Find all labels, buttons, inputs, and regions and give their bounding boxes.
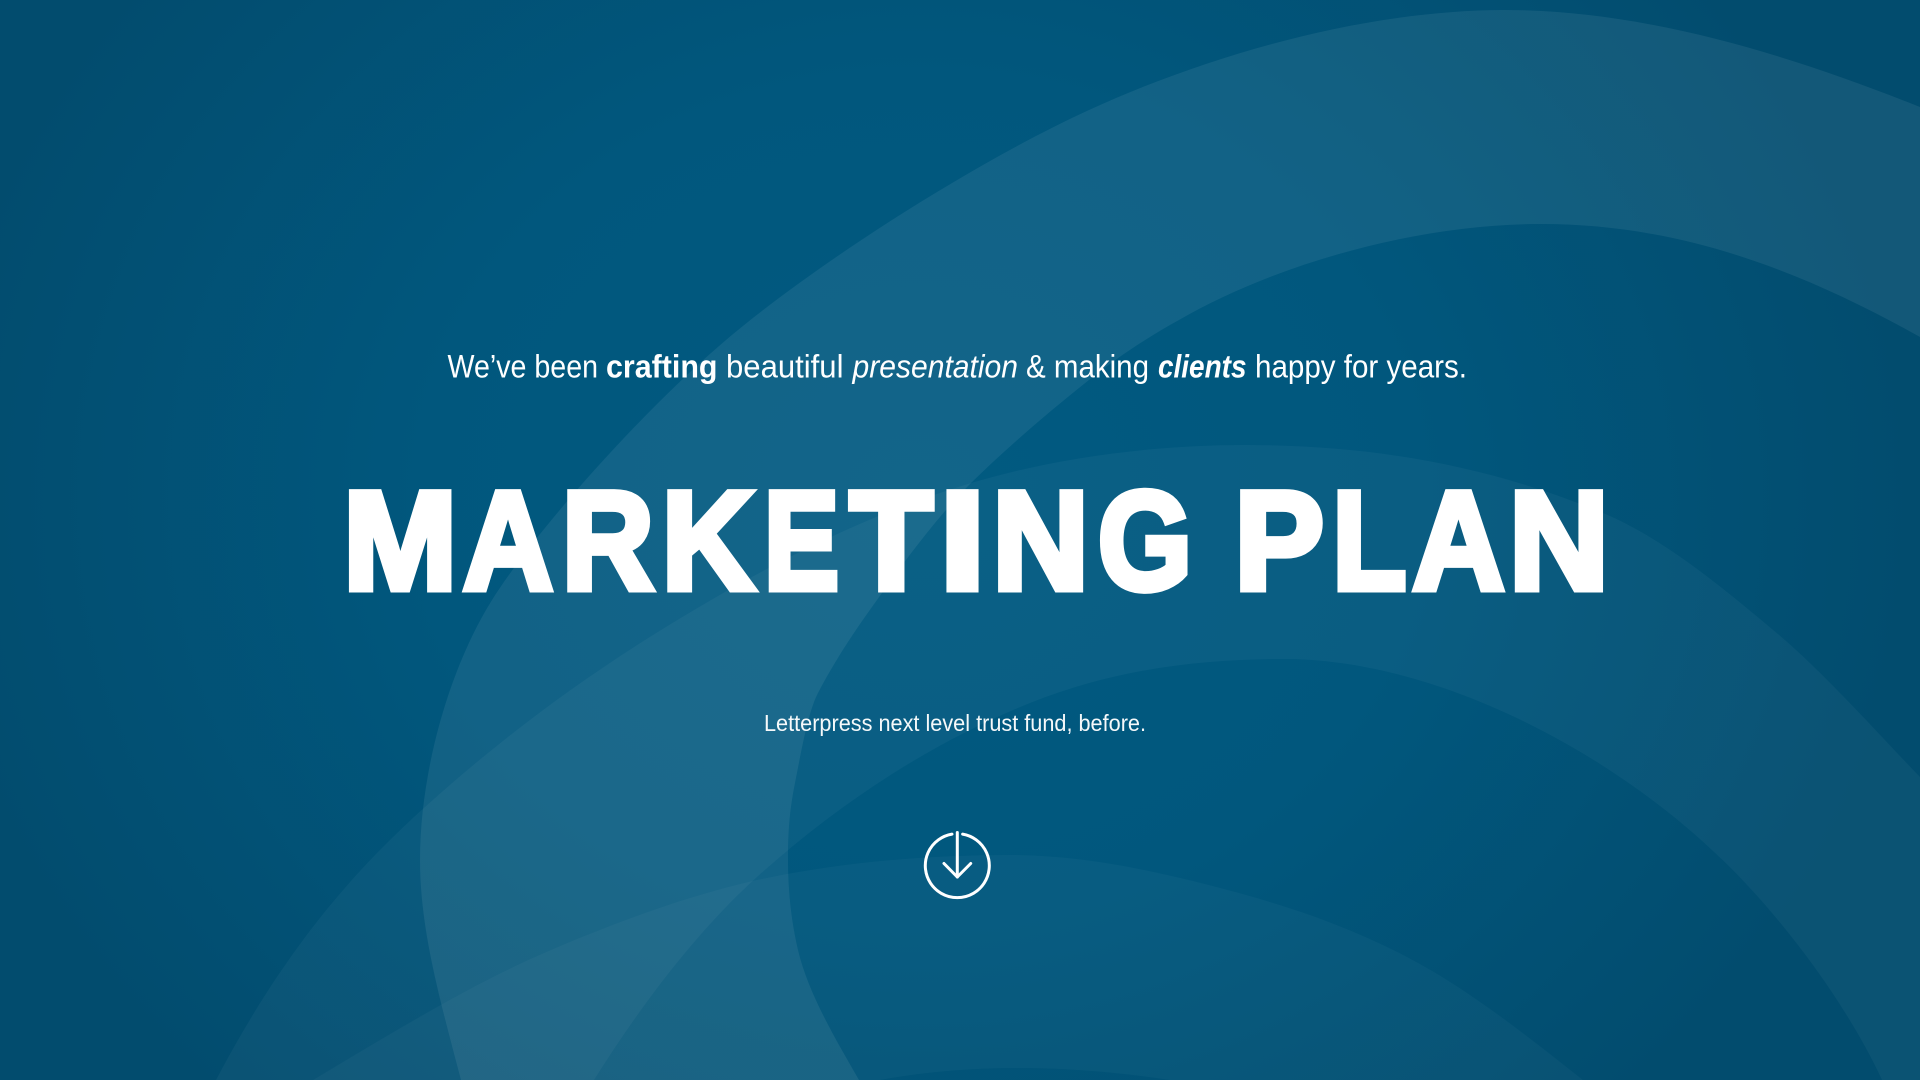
title: T [850,462,933,619]
band: large outer arc [420,10,1920,1080]
title: M [343,462,457,619]
title: G [1098,462,1192,619]
tagline: clients [1158,348,1246,384]
title: A [1412,462,1504,619]
band: middle arc [216,445,1920,1080]
title: L [1332,462,1406,619]
title: R [562,462,654,619]
title: A [463,462,553,619]
tagline: beautiful [726,348,844,384]
title: N [992,462,1089,619]
tagline: We’ve been [448,348,598,384]
tagline: presentation [852,348,1018,384]
tagline: & making [1026,348,1149,384]
icon: down arrow in circle [925,832,989,898]
title: N [1509,462,1609,619]
tagline: happy for years. [1255,348,1467,384]
title: P [1234,462,1324,619]
title: I [940,462,986,619]
title: K [662,462,754,619]
band: bottom arc [313,855,1583,1080]
subtitle: Letterpress next level trust fund, before. [764,710,1146,736]
tagline: crafting [606,348,718,384]
title: E [764,462,839,619]
